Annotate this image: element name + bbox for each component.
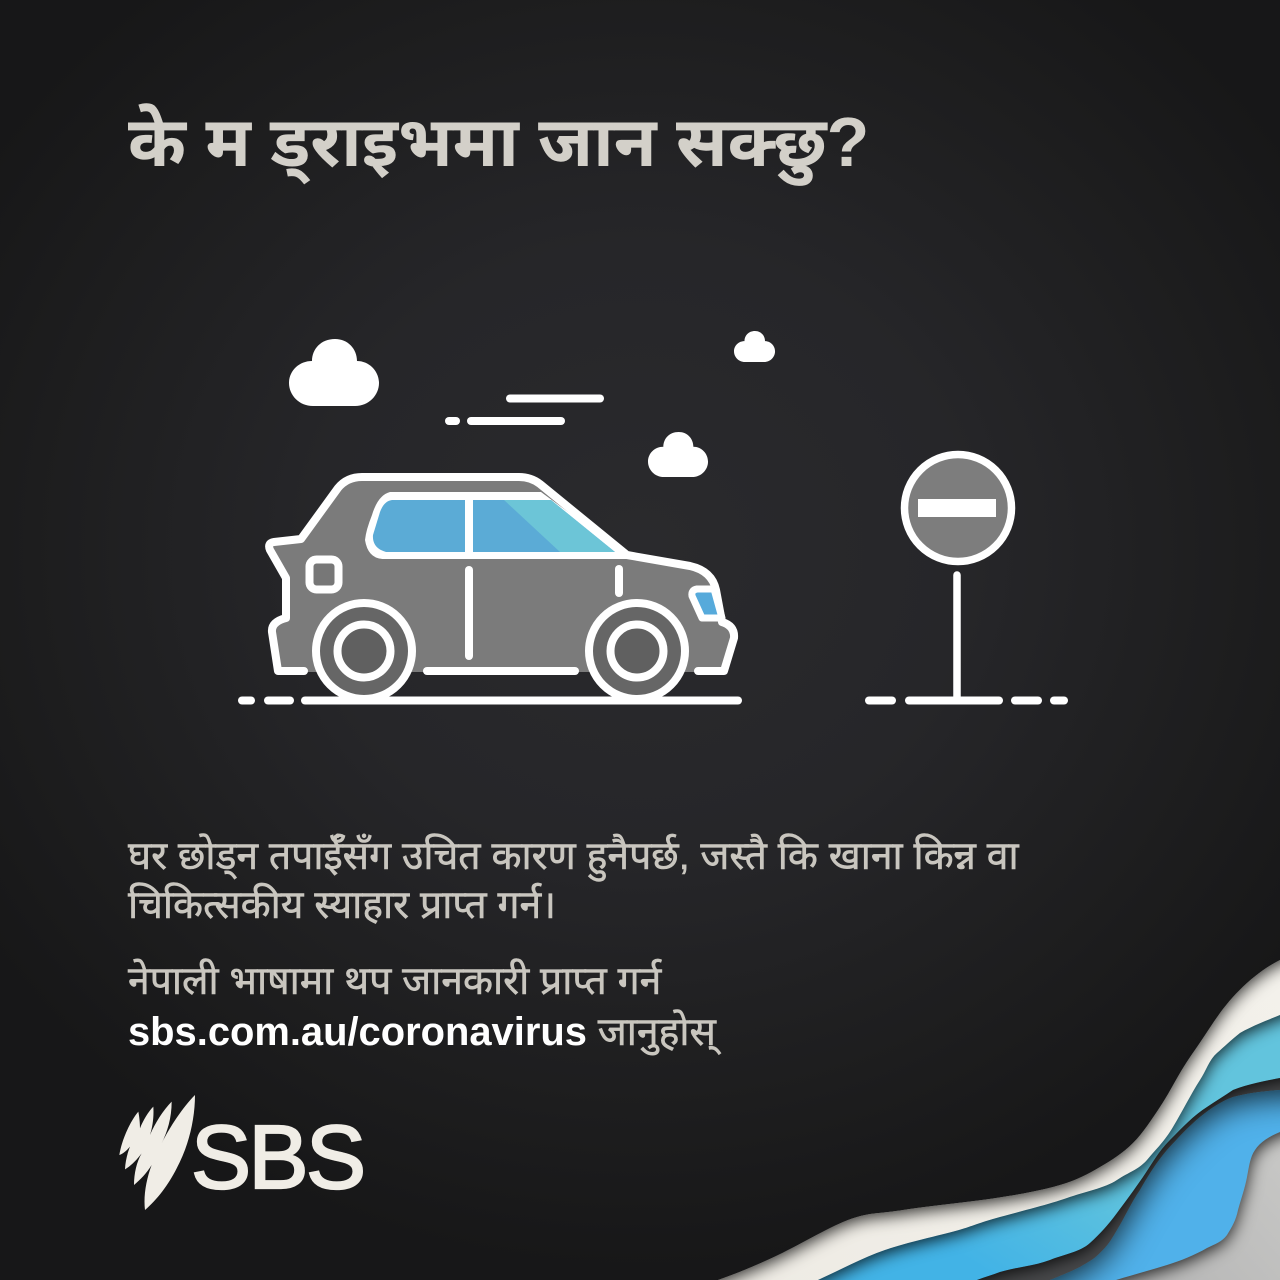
- sign bar: [918, 499, 996, 517]
- headlight: [692, 589, 722, 618]
- body text: चिकित्सकीय स्याहार प्राप्त गर्न।: [128, 884, 556, 927]
- door line: [465, 570, 473, 656]
- speed lines: [449, 398, 600, 421]
- front door line: [615, 569, 623, 593]
- paper wave layers, bottom right: [700, 935, 1280, 1280]
- body text: [128, 833, 1020, 927]
- icon: large cloud: [289, 339, 379, 406]
- icon: no entry sign: [904, 454, 1012, 700]
- car body outline: [269, 477, 734, 671]
- further information text: [128, 958, 722, 1056]
- fuel cap: [310, 560, 338, 590]
- rear wheel: [316, 603, 412, 699]
- body text: घर छोड्न तपाईँसँग उचित कारण हुनैपर्छ, जस्तै कि खाना किन्न वा: [128, 835, 1019, 878]
- road under sign: [869, 696, 1064, 704]
- sign disc: [904, 454, 1012, 562]
- SBS logo: [119, 1095, 364, 1210]
- logo wordmark: SBS: [191, 1108, 364, 1208]
- rear window: [373, 500, 465, 552]
- sill line: [427, 667, 575, 675]
- window reflection: [504, 500, 615, 552]
- sign pole: [953, 575, 961, 700]
- road under car: [242, 696, 738, 704]
- front window: [473, 500, 615, 552]
- further information text: sbs.com.au/coronavirus जानुहोस्: [128, 1010, 716, 1054]
- icon: car: [269, 477, 734, 699]
- window frame: [365, 492, 632, 559]
- logo mark: [119, 1095, 195, 1210]
- car body fill: [269, 477, 734, 672]
- title: के म ड्राइभमा जान सक्छु?: [128, 103, 869, 181]
- front wheel: [589, 603, 685, 699]
- further information text: नेपाली भाषामा थप जानकारी प्राप्त गर्न: [128, 960, 661, 1003]
- icon: small cloud top right: [734, 331, 775, 362]
- icon: medium cloud: [648, 432, 708, 477]
